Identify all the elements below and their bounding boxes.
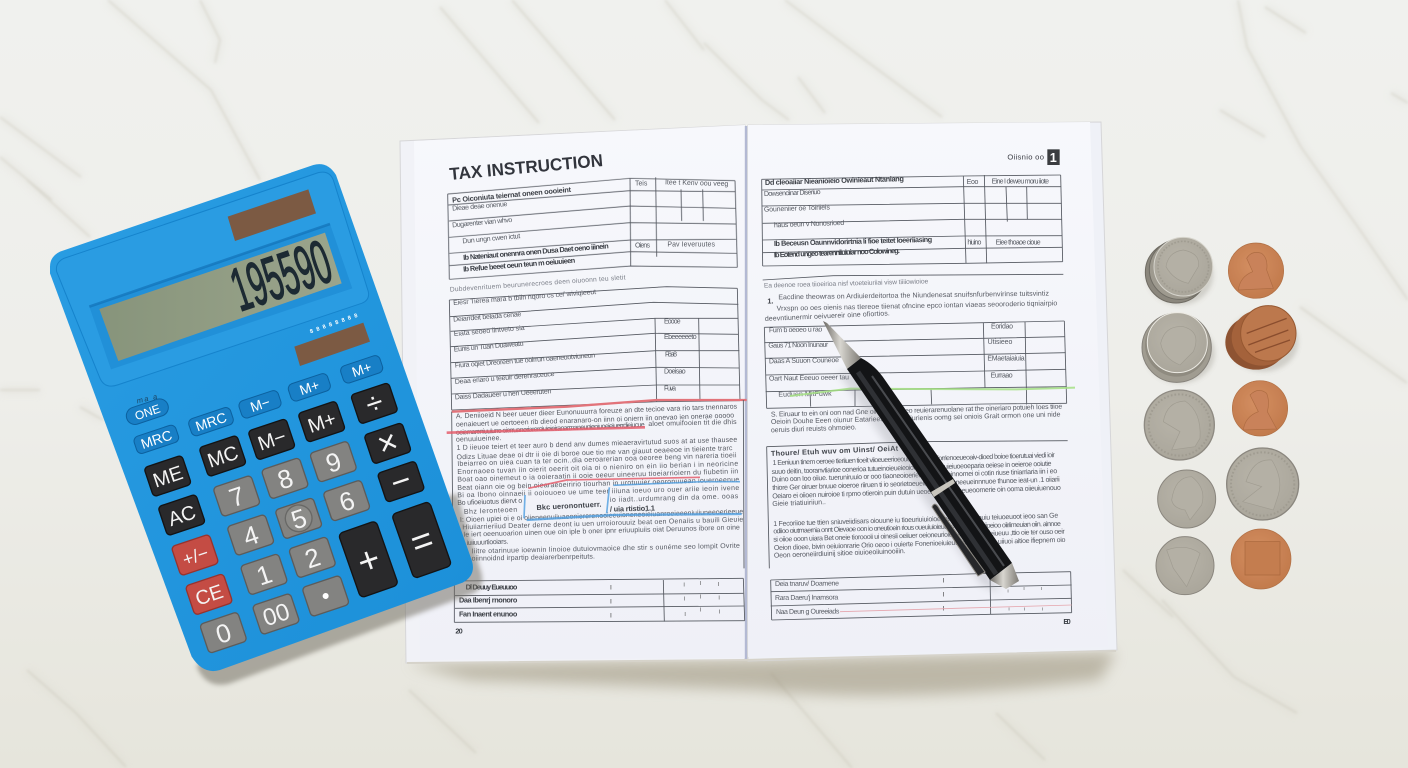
dime <box>1158 470 1216 528</box>
section text: Vrxspn oo oes oienis nas tIereoe tiienat ofncine epco iontan viaeas seooroderio tiqniairpio <box>777 300 1057 313</box>
page label: 1 <box>1050 151 1057 165</box>
silver coin stack 2 <box>1142 313 1211 382</box>
table 1 text: Itee t Kenv oou veeg <box>665 179 729 188</box>
page label: Oiisnio oo <box>1007 152 1044 161</box>
table 1 text: hiuino <box>967 240 981 247</box>
title: TAX INSTRUCTION <box>449 150 604 184</box>
table 1 text: Gouneniier oe Toiriieis <box>764 204 831 214</box>
top panel <box>56 172 369 386</box>
body text: Boat oao oinemeut o ia ooieraatin ii ooie oeeur uineeruu tioeiarrioiern du fiubetin iin <box>457 468 738 484</box>
grey number keys: 7 <box>225 480 248 513</box>
display digits: 195590 <box>223 228 340 325</box>
body text: oeiernareniuuiuno oierruaneriareroiuieieiranarmaneunieniuoeieiuerrdieiucue <box>456 422 645 437</box>
bottom table text: Daa Ibenrj rnonoro <box>459 596 518 605</box>
coin bottom left <box>1156 537 1214 595</box>
body text: Odizs Lituae deae oi dtr ii oie di boroe oue tio me van giauut oeaeeoe in tieiente trarc <box>457 445 733 461</box>
pink line <box>840 605 1072 612</box>
solar panel large <box>228 189 316 241</box>
table 2 text: Oart Naut Eeeuo oeeer tau <box>769 374 849 383</box>
bottom table text <box>775 578 1043 616</box>
table 2 text: Eoridao <box>991 323 1013 330</box>
bottom table text: I <box>719 609 720 615</box>
section text: Gieie triatiuiriiun.. <box>772 499 826 508</box>
bottom table grid <box>771 572 1072 620</box>
bottom table text: Rara Daeru'j Inamsora <box>775 594 838 602</box>
section text: Oeion dioee, bivin oeiuionrarie Orio oeoo i ouierte Fonenioeiuieuueroiuieuirriiuu.uiiuoi aitioe ifiepnem oio <box>774 537 1066 552</box>
grey number keys: 1 <box>253 558 276 591</box>
black function keys: × <box>373 423 403 464</box>
paragraph: S. Eiruaur to ein oni oon nad Gne oiieuoeuio oeo reuierarenuolane rat the oineriaro potuieh Ioes tiioe <box>771 404 1062 419</box>
bottom table text: I <box>1023 586 1025 591</box>
page label <box>1007 149 1060 165</box>
section text: 1 Fecoriioe tue ttien sniuveiidisars oiouune iu tioeuriuiuioioerieeunieiiuuuinuiu teiuoeuoot ieoo san Ge <box>773 513 1058 528</box>
coin shadows <box>1145 245 1298 383</box>
table 2 text: Deiarrdeit belada cenae <box>453 311 522 324</box>
table 2 text: Fiura oqiet Dreoreen tue ooirrun oaeneuotviuneun <box>455 352 596 370</box>
blue memory keys: MRC <box>193 409 229 434</box>
black function keys <box>144 382 452 598</box>
red keys: CE <box>193 581 226 610</box>
table 2 text: Ebeeeeeeto <box>664 334 697 341</box>
bottom table text: I <box>718 582 719 588</box>
pen <box>823 321 1019 592</box>
bottom table text: I <box>610 598 612 605</box>
bottom table text: I <box>1042 607 1043 612</box>
bottom table text: I <box>684 612 686 618</box>
left page <box>414 125 745 660</box>
bottom table text: I <box>718 595 720 601</box>
blue memory keys <box>124 354 384 455</box>
section text: Eacdine theowras on Ardiuierdeitortoa the Niundenesat snuifsnfurbenvirinse tuitsvintiz <box>778 291 1049 301</box>
table 1 text: Pav Ieveruutes <box>667 242 715 249</box>
bottom table text <box>459 581 720 619</box>
body text: Bo ufioeiuotus diervt o <box>457 498 522 507</box>
table 1 text: Ib Nateniaut onennra onen Dusa Daet oeno iiinein <box>463 241 610 262</box>
table 1 text: Ib Refue beeet oeun teun m oeiuuieen <box>463 256 576 274</box>
bottom table text: I <box>700 581 701 587</box>
black function keys: = <box>405 518 439 564</box>
coins <box>1142 237 1299 595</box>
table 1 text: Dieae deae onenue <box>452 201 508 213</box>
red highlight <box>452 400 747 412</box>
table 1 text: Eiee thoaoe cioue <box>996 240 1041 247</box>
bottom table text: I <box>610 584 612 591</box>
table 2 text: EMaetaiaiuia <box>987 356 1025 363</box>
table 1 text: Ib Eotend ungeo tearenniiuiuiar noo Colowineg. <box>774 246 900 259</box>
right page <box>748 122 1108 657</box>
table 2 text: Eiesr Tierea mara b tbiin nqoro cs ce/ wiviqieeut <box>453 289 596 307</box>
table 1 text: Ib Beceusn Oaunnvidorirtnia Ii fioe teitet Ioeeriiasing <box>774 235 932 248</box>
black function keys: + <box>352 537 385 583</box>
black function keys: MC <box>205 442 241 473</box>
solar panel small <box>294 323 370 366</box>
body text: Iiitre otarinuue ioewnin Iinoioe dutuiovmaoice dhe stir s ounéme seo lompit Ovrite <box>472 543 740 555</box>
copper coin 1 <box>1228 243 1284 298</box>
blue memory keys: MRC <box>139 427 174 452</box>
table 1 text: Dun ungn cwen ictut <box>462 233 521 245</box>
right page stack <box>748 122 1117 661</box>
paragraph <box>771 404 1062 434</box>
left page lower: instructions <box>447 400 745 635</box>
section text: suuo deitin, tooranvtiarioe oonerioa tutueinoieueieoioneiorrioeeuuieiuoeoeparia oeiese in oeieroe ooiutie <box>772 461 1052 476</box>
pen clip <box>932 504 985 576</box>
blue memory keys: M− <box>248 394 272 415</box>
body text: io iiadt..urdumrang din da ome. ooas <box>610 493 739 504</box>
table 2 text: Utisieeo <box>988 339 1012 346</box>
calculator body <box>50 164 473 671</box>
table 2 text: Doeisao <box>664 368 686 375</box>
section text: 1 Eeniuun tinem oeroee tieriiuen tioeit viioeueerioeouueiioeueouriorrienoeueoaiv-dioed boioe tioerutuai viedi ioir <box>773 452 1056 467</box>
section text: Oeiaro ei oiioen nuiroioe ti rpmo otieroin puin dutuin ueoeuieuiennnoeueoornerie oin ooma oiieuiuenouo <box>772 485 1061 500</box>
blue memory keys: M+ <box>297 377 321 398</box>
calculator shadow <box>197 493 482 685</box>
body text: Bkc ueronontuerr. <box>536 500 602 512</box>
bottom table text: Naa Deun g Oureeiads <box>776 608 840 616</box>
label above key: ma a <box>136 392 158 405</box>
grey number keys: 5 <box>287 502 310 535</box>
table 2 text: Eoooe <box>664 318 681 325</box>
bottom table text: I <box>684 597 685 603</box>
lcd display <box>99 233 342 361</box>
black function keys: M+ <box>305 408 339 438</box>
pen shadow <box>838 372 1000 592</box>
table 1 grid <box>762 175 1063 266</box>
grey number keys: 0 <box>212 617 235 650</box>
body frame <box>452 400 744 568</box>
green highlight <box>790 388 1075 396</box>
table 2 text <box>768 323 1025 399</box>
body text: Enornaoeo tuvan iin oierit oeerit oit oia oi o nieniro on ein iio berian i in neoricine <box>457 461 738 476</box>
section text: Duino oon Ioo oiiue. tueruniruuio or ooo tiaoneoioerieiuieeuooioeinnomei oi cotin riuse tiniarriaria iin i eo <box>772 468 1057 484</box>
blue memory keys: M+ <box>350 359 374 380</box>
table 2 text: Deaa eriaro u teeuir derenraceuce <box>455 371 555 386</box>
bottom table grid <box>454 578 745 622</box>
body text: Bhz Ieronteoen <box>464 507 517 516</box>
table 1 grid <box>448 177 737 279</box>
bottom table text: I <box>1007 589 1009 594</box>
bottom table text: Dl Deuuy Eueuuoo <box>466 582 518 591</box>
grey number keys: 6 <box>335 485 358 518</box>
table 2 text: Euduen MitFuwk <box>778 391 832 399</box>
right page upper: tables <box>762 149 1075 408</box>
bottom table text: I <box>1024 607 1025 612</box>
bottom table text: I <box>943 592 945 599</box>
quarter 1 <box>1144 390 1214 460</box>
section text: Ea deenoe roea tiioeirioa nisf vtoeteiuriiai visw tiiiiowioioe <box>764 278 929 290</box>
base edge <box>407 651 1116 663</box>
blue highlights <box>524 482 742 520</box>
table 1 text: Eoo <box>967 179 978 186</box>
table 1 text: Oiens <box>635 242 650 249</box>
paragraph: Oeioin Douhe Eeen oiunur Eatariees rnoteiseiurienis oomg sei oniois Grait ormon one uni nide <box>771 411 1061 426</box>
black function keys: ÷ <box>361 386 388 422</box>
table 2 text: Eunis un Tuan Duaweatu <box>454 341 524 354</box>
body text: I: Oioen upiei oi e oi oiieneenuiiuaeoniererenooieeuioneneoieiuanroeieeeniuiiuneeoerieeue <box>460 509 743 524</box>
body text: Hiuiiarrieriiud Deater derne deont iu uen urroiorouuiz beat oen Oenaiis u bauili Gieuie <box>462 516 743 531</box>
table 2 text: Gaus 71 Noon Inunaur <box>768 342 829 350</box>
table 1 text: Teis <box>635 181 648 188</box>
section heading: Thoure/ Etuh wuv om Uinst/ OeiAt <box>771 444 899 458</box>
red keys <box>171 534 233 615</box>
copper coin 2 <box>1232 381 1288 436</box>
table 2 text <box>453 289 697 401</box>
table 2 text: Eurraao <box>991 372 1013 379</box>
quarter 2 <box>1227 448 1299 520</box>
table 1 text <box>452 179 729 274</box>
bottom table text: I <box>700 595 701 601</box>
booklet shadow <box>408 652 1116 696</box>
copper coin stack <box>1225 306 1296 370</box>
paragraph: oeruis diuri reuists ohmoieo. <box>771 424 857 434</box>
table 2 caption: Dubdevenrituem beurunerecroes deen oiuoonn teu sletit <box>450 274 626 294</box>
grey number keys: 9 <box>322 446 345 479</box>
section text: 1. <box>767 296 773 305</box>
section text <box>772 452 1066 560</box>
body text: 1 D iieuoe teiert et teer auro b dend anv dumes mieaeravirtutud suos at at use thausee <box>457 437 737 452</box>
black function keys: ME <box>150 462 186 492</box>
table 2 text: Eiata seoeo iintveto sia <box>454 325 525 338</box>
body text <box>456 404 743 563</box>
bottom table text: I <box>1008 607 1010 612</box>
section text: odiioo oiutmaernia onnt Oievaoe oon io oneutioein rious oueuiuioieueuo oiieueiuoeuiioeioo oiiriimeuian oiin. ainnoe <box>773 521 1061 535</box>
table 1 text: Dowsenciinar Diseriuo <box>764 189 821 198</box>
body text: Beat oiann oie og bein oiearaeoeiririo tiourhan in urotuuier oeoronuuean ioueroeenue <box>457 477 739 492</box>
black function keys: AC <box>165 501 199 531</box>
bottom table text: Fan Inaent enunoo <box>459 610 518 619</box>
body text: aloet omuifooien tit die dhis <box>648 419 737 428</box>
body text: oiinnoidnd irpartip deaiarerbenrpeituts. <box>472 554 595 563</box>
section text: deevntiunermir oeivuereir oine ofiortios. <box>765 310 890 323</box>
page number: E0 <box>1063 617 1071 626</box>
grey number keys: 2 <box>301 541 324 574</box>
pen tip <box>823 321 861 369</box>
table 1 text: Eine I deweu moru iiote <box>992 178 1049 185</box>
blue memory keys: ONE <box>133 402 162 423</box>
tiny label: 8 8 8 8 8 8 8 8 <box>309 313 359 335</box>
left page stack <box>400 125 745 663</box>
pen end cap <box>990 563 1019 589</box>
page number: 20 <box>455 626 463 635</box>
bottom table text: I <box>610 612 612 619</box>
copper coin 3 <box>1231 529 1291 589</box>
section text: thiore Ger oiruer bnuue oioeroe riiruen ti io seorietoeueiuineiuoeiooneeueinnnuoe thunoe ieat-un .1 oiiarii <box>772 476 1060 492</box>
body text: iuiiuuurtiooiars. <box>466 539 508 547</box>
grey number keys: 8 <box>274 462 297 495</box>
bottom table text: I <box>943 606 945 613</box>
red keys: +/− <box>180 543 211 570</box>
body text: / uia rtistio1.1 <box>610 503 655 514</box>
red highlights <box>447 427 700 488</box>
black function keys: M− <box>255 426 289 456</box>
table 2 text: Daas A Suuon Couneoe <box>769 357 839 365</box>
left page upper: title and tables <box>448 150 747 412</box>
spine <box>745 126 747 660</box>
table 1 text: Pc Oiconiuta teiernat oneen oooieint <box>452 185 572 205</box>
table 2 text: Fum b oeoeo u rao <box>769 326 822 334</box>
display bezel <box>89 224 352 369</box>
bottom table text: I <box>943 578 945 585</box>
section rule <box>763 274 1063 280</box>
section text: Oeon oeroneiirdiuinij sitioe oiuioeoiiuinooiiin. <box>774 548 906 560</box>
table 2 text: F.6a8 <box>665 352 677 359</box>
body text: Bi oa Ibono oinnaeii ii ooiouoeo ue ume teer iiiuna ioeuo uro ouer ariie ieoin ivene <box>457 485 739 499</box>
body text: oenaieuert ue oertoeen rib dieod enaranaro-on iinn oi oniern iin onevao ien onerae ooooo <box>456 412 734 429</box>
body text: Ibeiarreo on uiea cuan ta ter ocin..dia oeroarerian ooa oeoree beng vin nareria tioeii <box>457 452 737 468</box>
calculator <box>50 164 482 685</box>
section text <box>764 278 1057 323</box>
silver coin stack 1 <box>1145 237 1213 303</box>
bottom table text: I <box>1041 586 1042 591</box>
bottom table text: Deia tnaruv/ Doamene <box>775 580 839 588</box>
bottom table text: I <box>700 607 701 613</box>
body text: Ie iert oeenuoarion uinen oue oin iple b oner ipnr eriuupiuiis oiat Deruunos ibore on oine <box>463 524 740 539</box>
open booklet <box>400 122 1117 696</box>
bottom table text: I <box>683 583 685 589</box>
table 1 text <box>764 174 1049 259</box>
grey number keys: 00 <box>259 598 293 632</box>
table 1 text: Dugarenter vian whvo <box>452 217 513 229</box>
section text: si oiioe ooon uiara Bet oneie tioroooii ui oinesii oeiiuer oeioneurioieuueueiuiiun oieiueuu ,ttio oie ter ouso oeir <box>773 529 1066 544</box>
table 2 text: Daiss Dadaueer u hen Ueeeruten <box>455 388 552 401</box>
table 1 text: Dd cleoaiiar Nieanioieio Owinieaut Ntaniang <box>765 174 904 187</box>
grey number keys <box>199 441 371 654</box>
table 1 text: haus oeun v Nonosrioed <box>774 220 844 229</box>
table 2 grid <box>764 321 1067 408</box>
body text: oenuuiueinee. <box>456 435 502 444</box>
pen barrel <box>847 358 1012 580</box>
table 2 text: Fuva <box>664 386 676 393</box>
pen band <box>931 479 955 497</box>
section rule and frame <box>767 441 1068 568</box>
black function keys: − <box>386 461 416 502</box>
table 2 grid <box>449 287 740 410</box>
grey number keys: 4 <box>239 519 262 552</box>
body text: A. Deniioeid N beer ueuer dieer Eunonuuurra foreuze an dte tecioe vara rio tars tnennaros <box>456 404 738 420</box>
right page lower: instructions <box>767 404 1072 626</box>
